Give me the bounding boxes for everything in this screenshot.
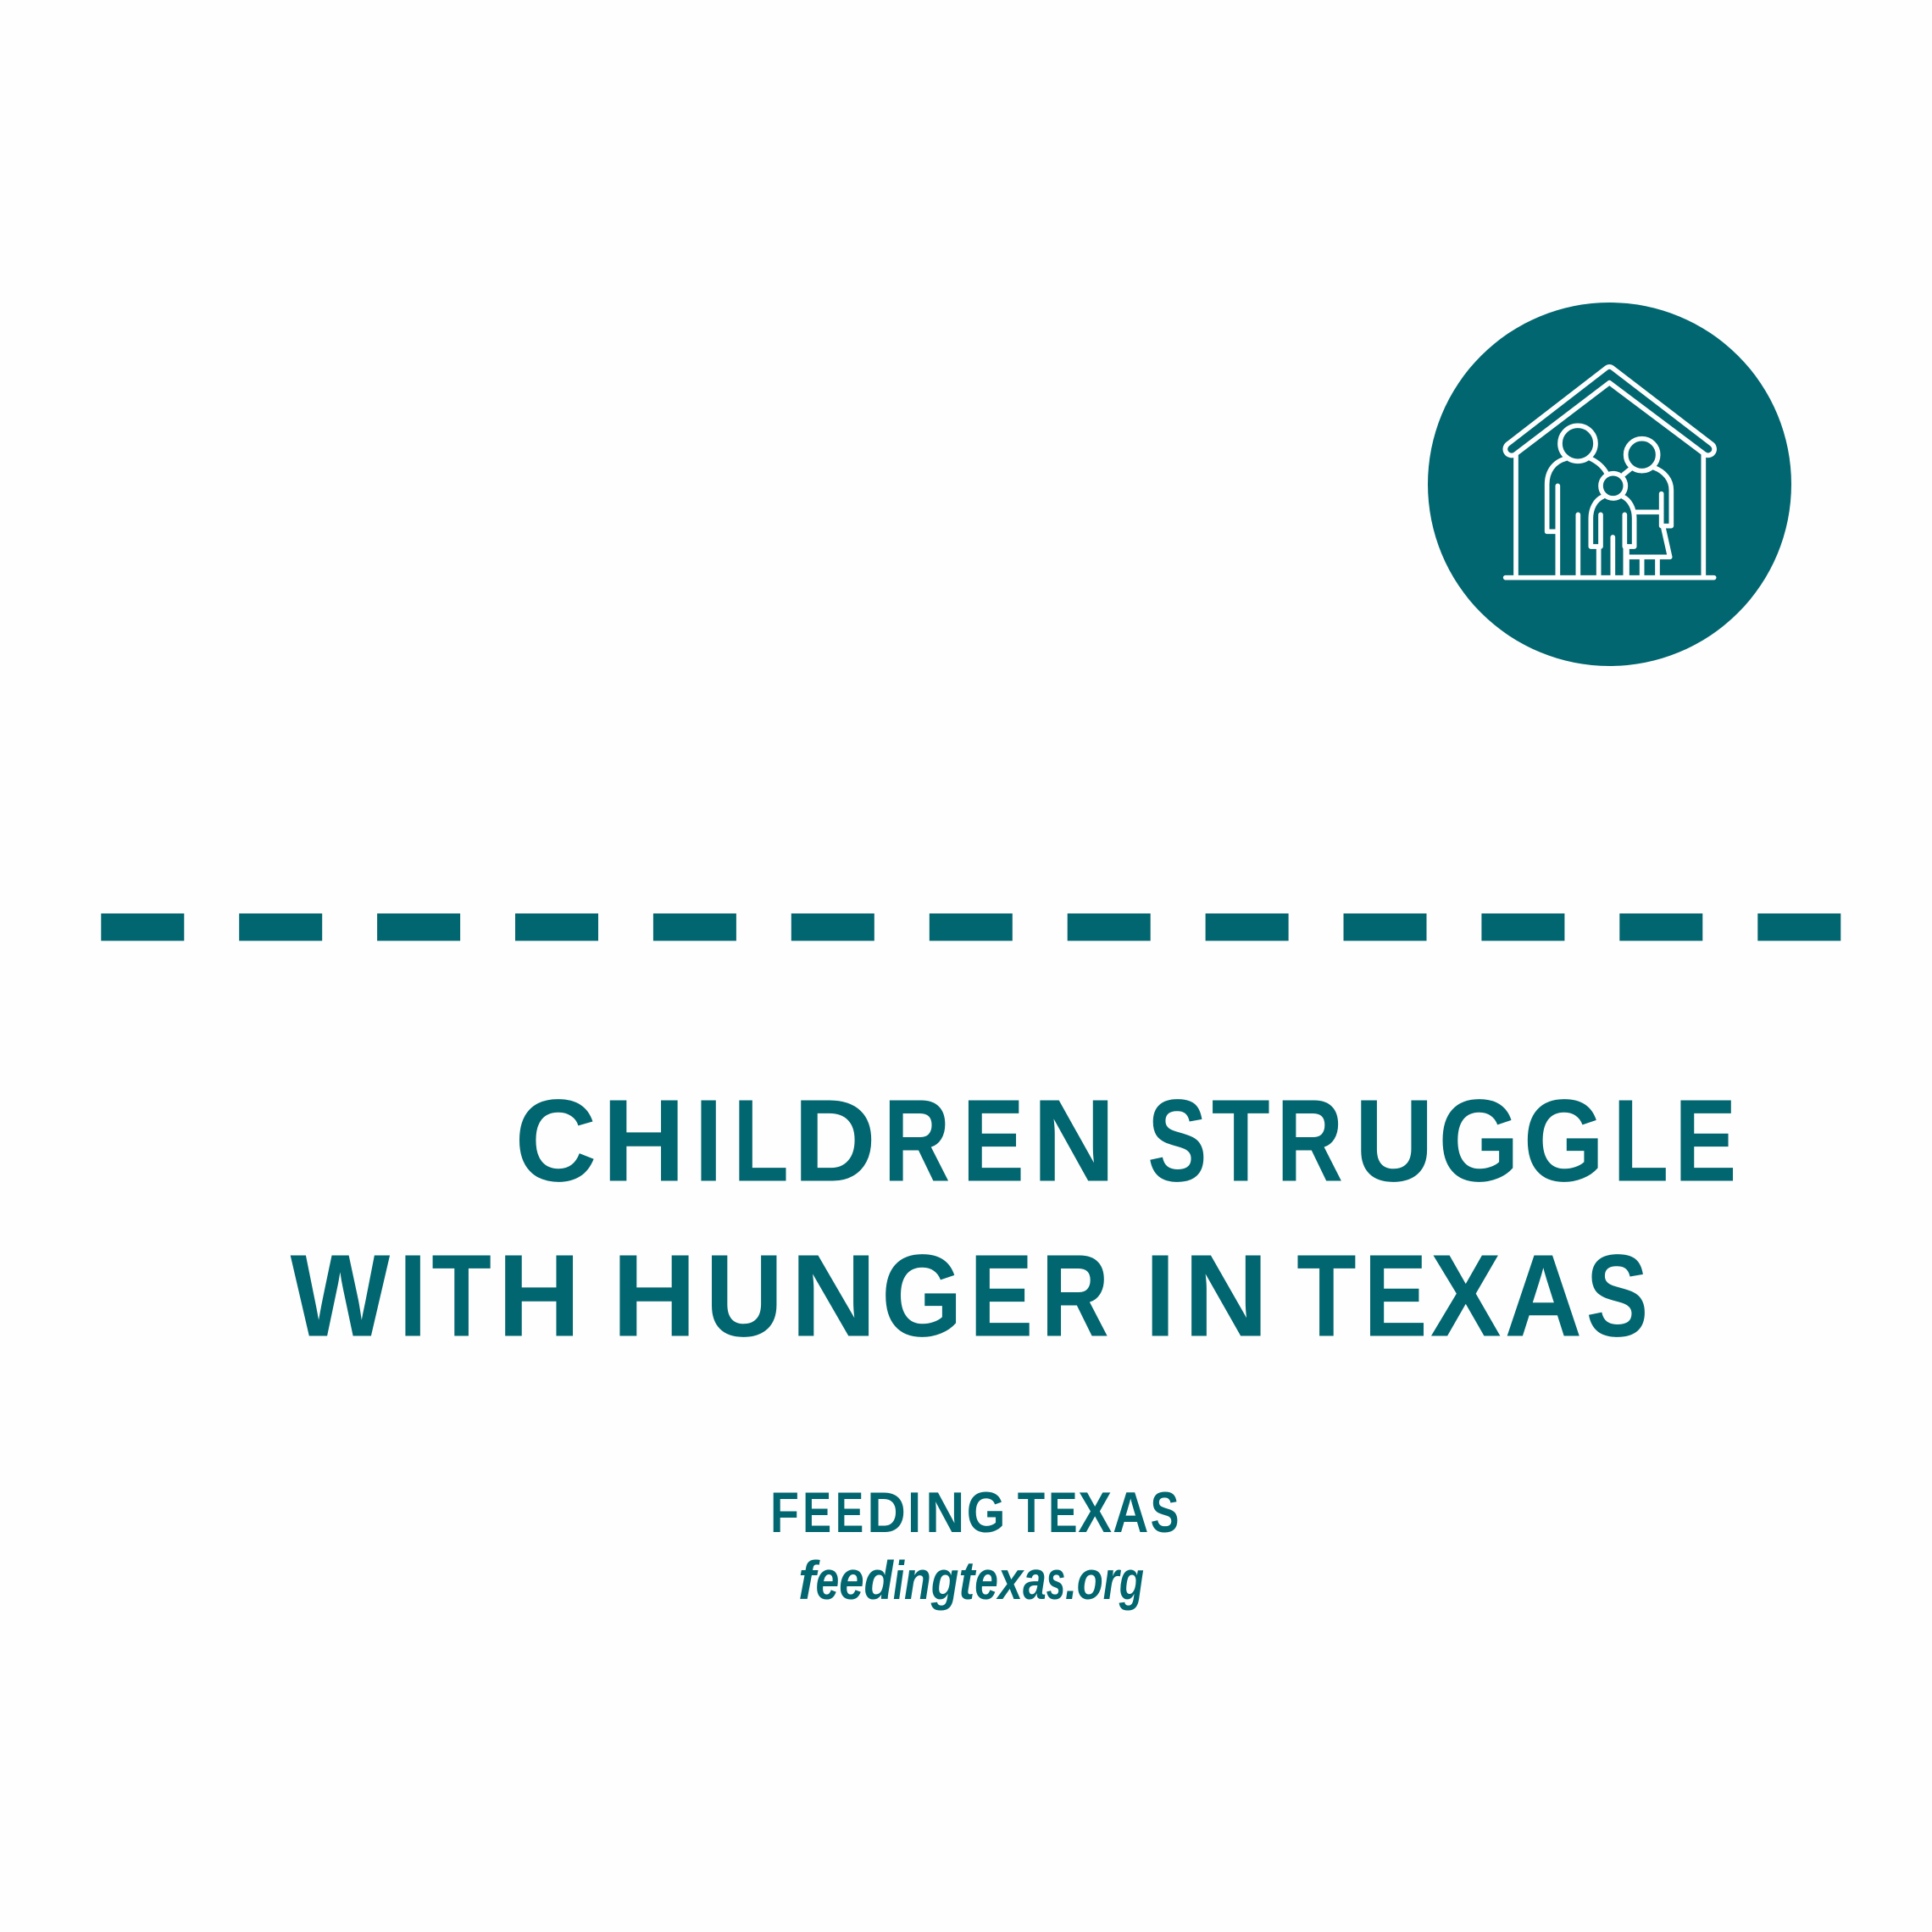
organisation name: E	[1048, 1480, 1078, 1545]
website url: t	[958, 1550, 977, 1611]
title line 2: N	[791, 1230, 877, 1361]
title line 1: N	[1032, 1076, 1115, 1207]
title line 1	[515, 1076, 1736, 1207]
title line 2: E	[1364, 1230, 1427, 1361]
title line 2: H	[612, 1230, 697, 1361]
title line 2: N	[1184, 1230, 1269, 1361]
website url: .	[1065, 1550, 1077, 1611]
website url: e	[816, 1550, 839, 1611]
title line 1: I	[694, 1076, 723, 1207]
title line 2: T	[1296, 1230, 1357, 1361]
title line 1: R	[1276, 1076, 1343, 1207]
title line 1: E	[963, 1076, 1024, 1207]
title line 1: C	[515, 1076, 597, 1207]
title line 1: R	[884, 1076, 950, 1207]
title line 2: E	[969, 1230, 1033, 1361]
title line 2: I	[398, 1230, 427, 1361]
house and family line art	[1505, 367, 1714, 578]
title line 2: R	[1041, 1230, 1109, 1361]
organisation name: T	[1018, 1480, 1045, 1545]
title line 1: L	[1613, 1076, 1668, 1207]
website url: i	[893, 1550, 905, 1611]
website url: o	[1077, 1550, 1103, 1611]
title line 2: W	[291, 1230, 391, 1361]
title line 2	[291, 1230, 1648, 1361]
website url: a	[1023, 1550, 1046, 1611]
website url: x	[996, 1550, 1024, 1611]
website url: f	[798, 1550, 820, 1611]
title line 1: H	[602, 1076, 686, 1207]
title line 2: S	[1586, 1230, 1648, 1361]
title line 1: U	[1354, 1076, 1434, 1207]
title line 1: E	[1674, 1076, 1736, 1207]
title line 2: T	[431, 1230, 491, 1361]
title line 2: U	[705, 1230, 783, 1361]
dashed divider	[101, 913, 1840, 941]
title line 1: D	[793, 1076, 876, 1207]
organisation name: F	[770, 1480, 799, 1545]
website url: g	[930, 1550, 958, 1611]
website url: g	[1119, 1550, 1144, 1611]
organisation name: X	[1078, 1480, 1112, 1545]
title line 1: G	[1524, 1076, 1604, 1207]
organisation name: G	[967, 1480, 1005, 1545]
title line 1: L	[733, 1076, 789, 1207]
website url: d	[864, 1550, 895, 1611]
website url: n	[904, 1550, 931, 1611]
organisation name: N	[925, 1480, 964, 1545]
title	[291, 1076, 1736, 1361]
organisation name	[770, 1480, 1179, 1545]
organisation name: D	[867, 1480, 906, 1545]
title line 2: H	[497, 1230, 580, 1361]
title line 1: T	[1212, 1076, 1270, 1207]
title line 1: G	[1439, 1076, 1519, 1207]
title line 1: S	[1147, 1076, 1207, 1207]
title line 2: A	[1505, 1230, 1582, 1361]
icon: family in house	[1428, 303, 1791, 666]
website url: s	[1046, 1550, 1065, 1611]
organisation name: A	[1113, 1480, 1148, 1545]
website url: e	[974, 1550, 998, 1611]
website url: r	[1103, 1550, 1121, 1611]
organisation name: I	[908, 1480, 921, 1545]
organisation name: S	[1151, 1480, 1179, 1545]
title line 2: G	[881, 1230, 963, 1361]
organisation name: E	[836, 1480, 863, 1545]
organisation name: E	[802, 1480, 831, 1545]
title line 2: I	[1145, 1230, 1175, 1361]
title line 2: X	[1430, 1230, 1502, 1361]
teal circle	[1428, 303, 1791, 666]
website url: e	[839, 1550, 864, 1611]
